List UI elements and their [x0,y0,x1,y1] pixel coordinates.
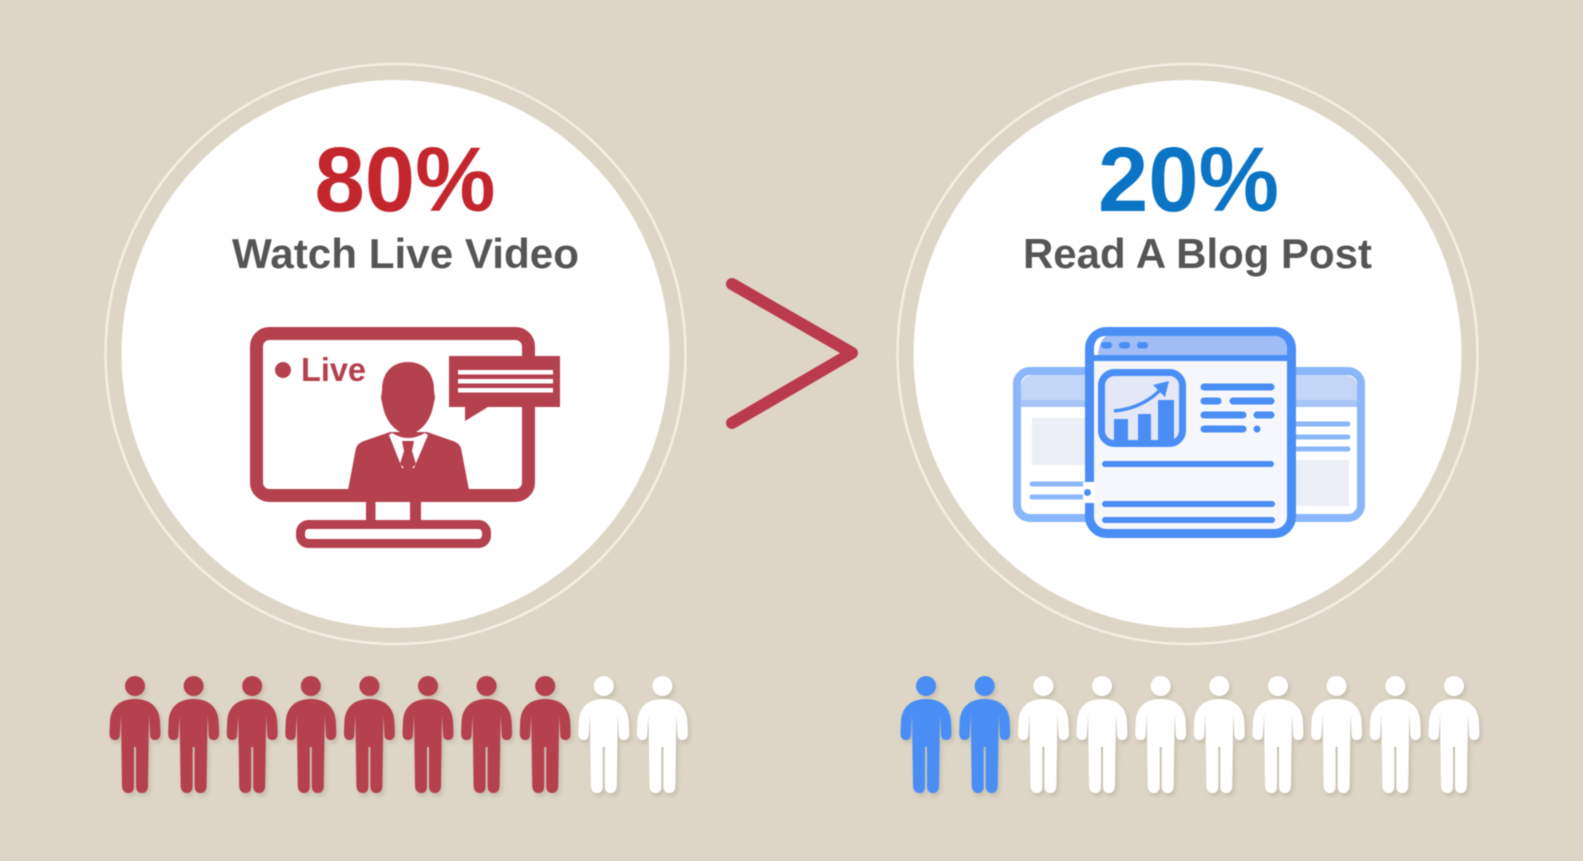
arrow: greater than symbol [732,284,852,423]
percentage: 20%: 20% [1098,129,1279,231]
panel: live video circle [106,64,686,644]
icon: live video monitor: Live [301,351,366,388]
pictogram: 8 of 10 people red [110,676,688,793]
panel: blog post circle [898,64,1478,644]
pictogram: 2 of 10 people blue [900,676,1480,793]
icon: blog post windows [1017,332,1361,534]
heading: read a blog post: Read A Blog Post [1023,230,1372,277]
heading: watch live video: Watch Live Video [232,230,579,277]
icon: live video monitor [256,334,560,544]
percentage: 80%: 80% [314,129,496,231]
